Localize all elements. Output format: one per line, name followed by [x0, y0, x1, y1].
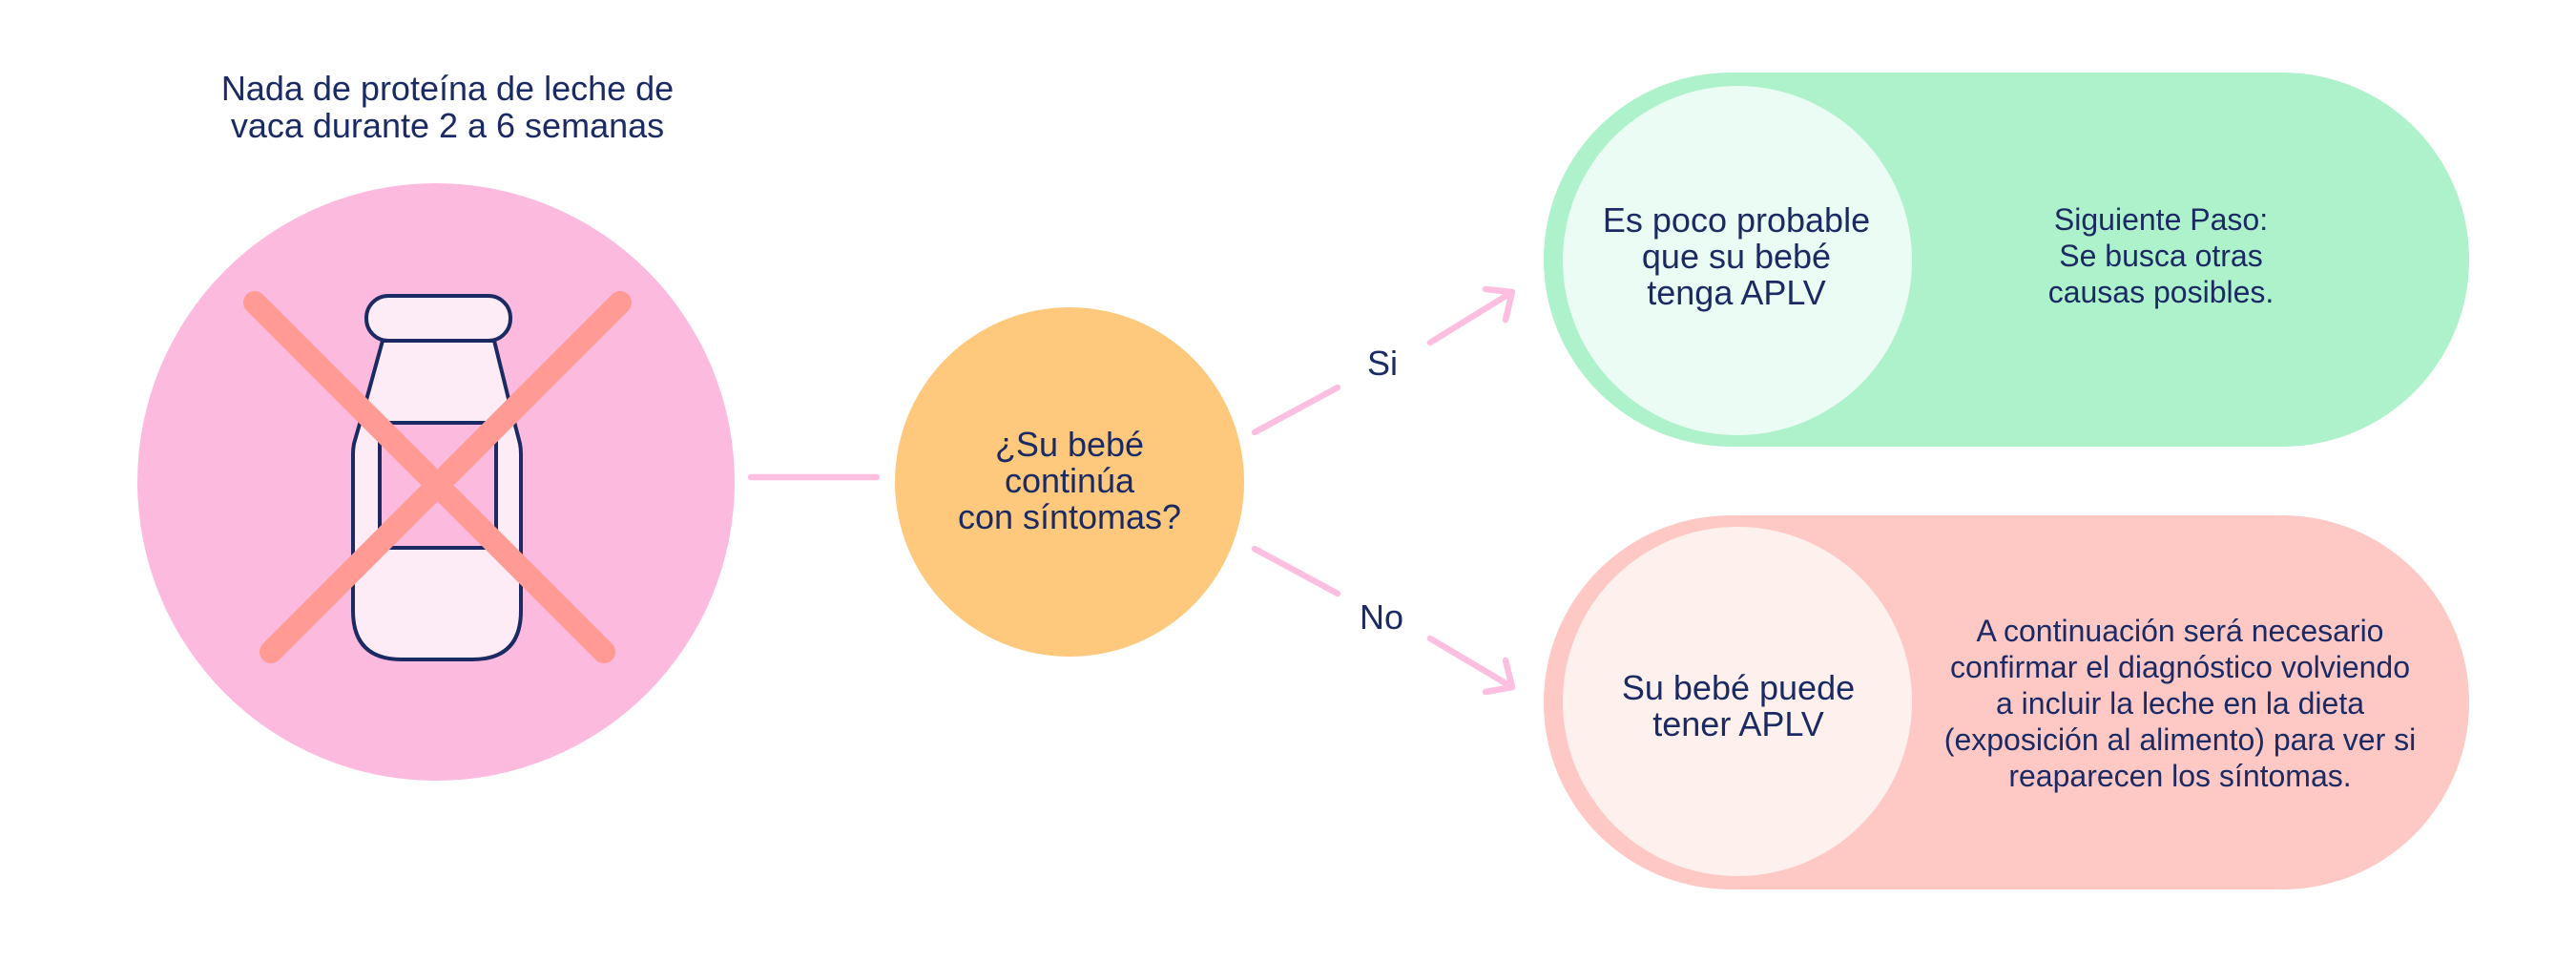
- label: yes: Si: [1367, 344, 1398, 383]
- next step text: Siguiente Paso:: [2054, 202, 2268, 237]
- next step text: reaparecen los síntomas.: [2008, 759, 2352, 793]
- next step text: causas posibles.: [2048, 275, 2274, 309]
- arrow: yes: [1430, 289, 1512, 343]
- connector: yes line: [1255, 387, 1338, 432]
- panel: unlikely CMPA: [1544, 73, 2469, 447]
- connector: bottle to question: [751, 474, 877, 480]
- label: no: No: [1360, 597, 1403, 637]
- next step text: (exposición al alimento) para ver si: [1944, 722, 2416, 757]
- green pill: [1544, 73, 2469, 447]
- next step text: A continuación será necesario: [1977, 614, 2383, 648]
- panel: possible CMPA: [1544, 515, 2469, 889]
- next step text: a incluir la leche en la dieta: [1996, 686, 2364, 721]
- pink circle: [137, 183, 735, 781]
- icon: red cross: [255, 303, 620, 652]
- red pill: [1544, 515, 2469, 889]
- title: no cow's milk protein: Nada de proteína de leche de: [221, 69, 674, 108]
- light green circle: [1563, 86, 1912, 435]
- question text: continúa: [1005, 461, 1135, 500]
- connector: no line: [1255, 549, 1338, 594]
- question text: ¿Su bebé: [995, 425, 1144, 464]
- outcome text: tener APLV: [1652, 704, 1824, 743]
- next step text: Se busca otras: [2059, 239, 2263, 273]
- light red circle: [1563, 527, 1912, 876]
- question text: con síntomas?: [958, 497, 1181, 536]
- panel: question circle: [895, 307, 1244, 657]
- icon: milk bottle: [353, 296, 521, 659]
- arrow: no: [1430, 638, 1512, 692]
- orange circle: [895, 307, 1244, 657]
- title: no cow's milk protein: vaca durante 2 a 6 semanas: [231, 106, 664, 145]
- next step text: confirmar el diagnóstico volviendo: [1950, 650, 2410, 684]
- outcome text: que su bebé: [1642, 237, 1831, 276]
- outcome text: tenga APLV: [1647, 273, 1826, 312]
- outcome text: Su bebé puede: [1622, 668, 1855, 707]
- panel: bottle circle: [137, 183, 735, 781]
- outcome text: Es poco probable: [1603, 200, 1870, 240]
